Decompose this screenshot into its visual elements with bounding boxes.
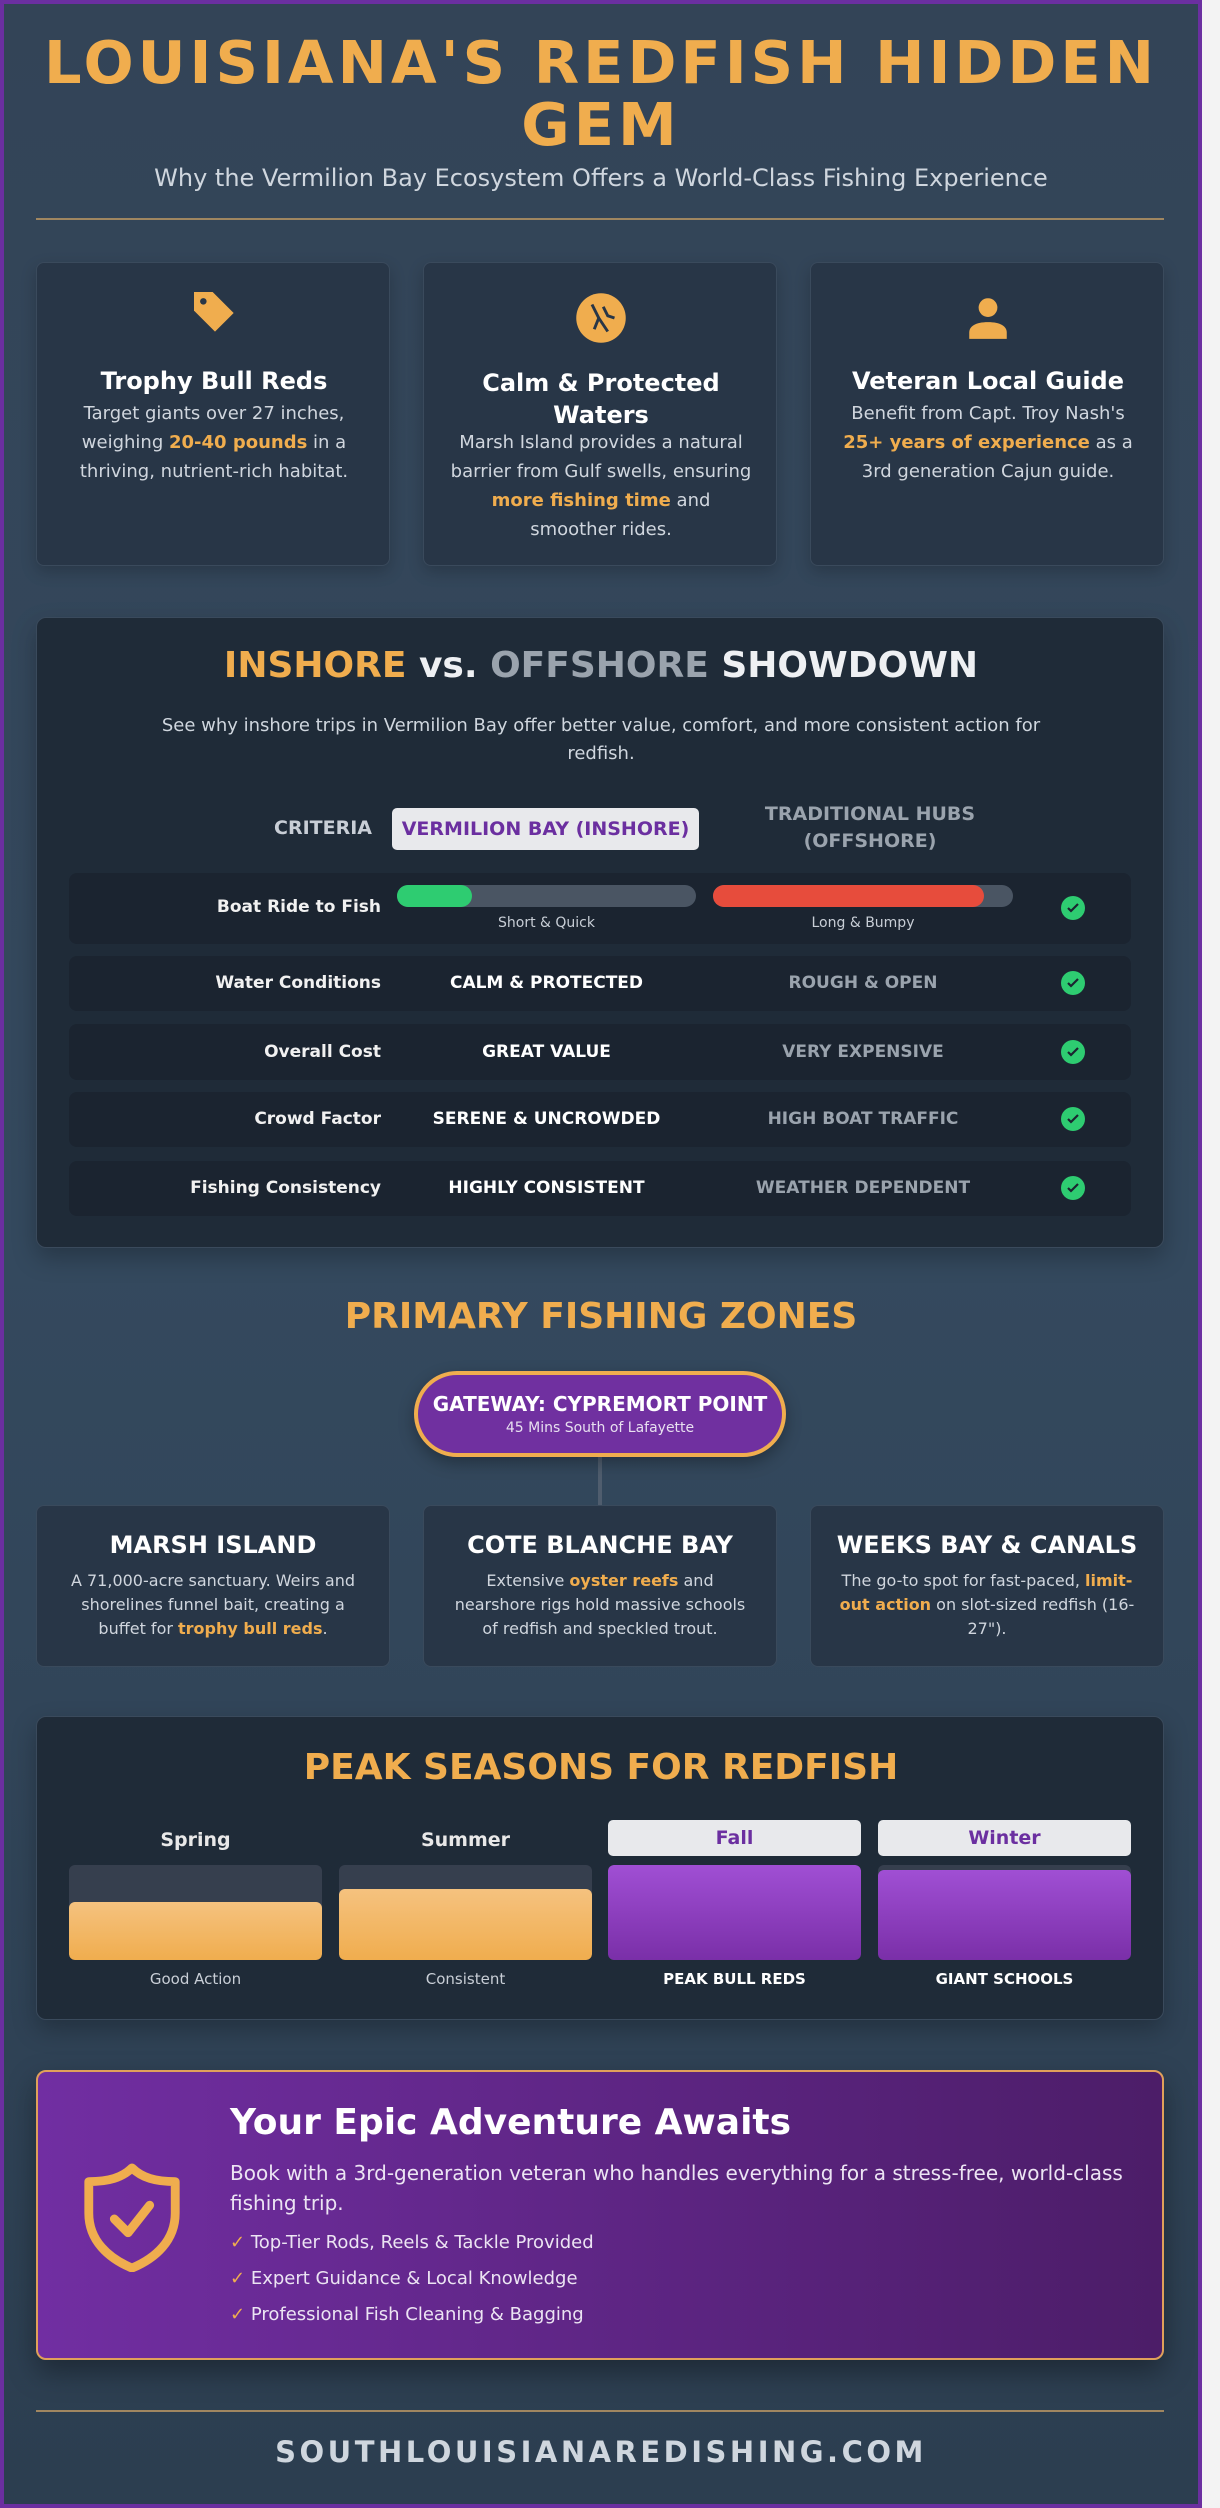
row: boat ride bbox=[69, 873, 1131, 944]
bar: offshore bbox=[713, 885, 1013, 907]
text: GIANT SCHOOLS bbox=[936, 1970, 1073, 1988]
row: consistency bbox=[69, 1161, 1131, 1216]
bar: inshore bbox=[397, 885, 696, 907]
vermilion bay header: VERMILION BAY (INSHORE) bbox=[402, 818, 689, 840]
text: Benefit from Capt. Troy Nash's 25+ years of experience as a 3rd generation Cajun guide. bbox=[843, 403, 1133, 482]
row: crowd: SERENE & UNCROWDED bbox=[433, 1109, 660, 1129]
row: crowd bbox=[69, 1092, 1131, 1147]
text: PEAK BULL REDS bbox=[663, 1970, 806, 1988]
row: cost bbox=[69, 1024, 1131, 1080]
season: fall bbox=[608, 1820, 861, 1988]
text: Target giants over 27 inches, weighing 20-40 pounds in a thriving, nutrient-rich habitat. bbox=[80, 403, 348, 482]
card: trophy bull reds bbox=[36, 262, 390, 566]
subtitle: Why the Vermilion Bay Ecosystem Offers a World-Class Fishing Experience bbox=[154, 164, 1048, 192]
bullet list bbox=[230, 2232, 594, 2325]
bullet list: ✓ Top-Tier Rods, Reels & Tackle Provided bbox=[230, 2232, 594, 2253]
gateway pill bbox=[414, 1371, 786, 1457]
card: calm waters bbox=[423, 262, 777, 566]
text: Book with a 3rd-generation veteran who handles everything for a stress-free, world-class fishing trip. bbox=[230, 2161, 1123, 2215]
traditional hubs header bbox=[765, 803, 975, 852]
row: cost: GREAT VALUE bbox=[482, 1042, 611, 1062]
text: Fall bbox=[716, 1827, 753, 1849]
vermilion bay header bbox=[392, 808, 699, 850]
season: winter bbox=[878, 1820, 1131, 1988]
zone: weeks bay: The go-to spot for fast-paced, limit-out action on slot-sized redfish (16-27"). bbox=[840, 1571, 1134, 1638]
gateway pill: GATEWAY: CYPREMORT POINT bbox=[433, 1392, 767, 1416]
row: boat ride: Long & Bumpy bbox=[812, 915, 914, 931]
bullet list: ✓ Expert Guidance & Local Knowledge bbox=[230, 2268, 578, 2289]
text bbox=[451, 432, 751, 540]
row: water conditions bbox=[69, 956, 1131, 1011]
text: barrier from Gulf swells, ensuring bbox=[451, 461, 751, 482]
text: Marsh Island provides a natural bbox=[459, 432, 743, 453]
icon: check bbox=[1061, 896, 1085, 920]
zone: cote blanche bay: COTE BLANCHE BAY bbox=[467, 1531, 733, 1559]
row: water conditions: ROUGH & OPEN bbox=[789, 973, 937, 993]
row: boat ride: Boat Ride to Fish bbox=[217, 897, 381, 917]
text: Winter bbox=[968, 1827, 1041, 1849]
callout: epic adventure bbox=[36, 2070, 1164, 2360]
heading: primary fishing zones: PRIMARY FISHING ZONES bbox=[345, 1296, 857, 1337]
season: spring bbox=[69, 1829, 322, 1988]
text: Consistent bbox=[426, 1970, 505, 1988]
row: consistency: Fishing Consistency bbox=[190, 1178, 381, 1198]
icon: person bbox=[969, 298, 1007, 339]
bullet list: ✓ Professional Fish Cleaning & Bagging bbox=[230, 2304, 584, 2325]
icon: tag bbox=[194, 292, 234, 332]
row: cost: Overall Cost bbox=[264, 1042, 381, 1062]
title: GEM bbox=[521, 90, 681, 159]
column headers bbox=[274, 803, 975, 852]
footer url: SOUTHLOUISIANAREDISHING.COM bbox=[275, 2435, 927, 2469]
zone: weeks bay: WEEKS BAY & CANALS bbox=[837, 1531, 1137, 1559]
row: boat ride: Short & Quick bbox=[498, 915, 595, 931]
row: water conditions: Water Conditions bbox=[215, 973, 381, 993]
card: veteran guide bbox=[810, 262, 1164, 566]
text: Spring bbox=[160, 1829, 231, 1851]
icon: compass bbox=[576, 293, 626, 343]
panel: inshore vs offshore bbox=[36, 617, 1164, 1248]
gateway pill: 45 Mins South of Lafayette bbox=[506, 1420, 694, 1436]
heading: Waters bbox=[553, 401, 649, 429]
heading: PEAK SEASONS FOR REDFISH bbox=[304, 1747, 898, 1788]
traditional hubs header: (OFFSHORE) bbox=[804, 830, 936, 852]
text: Summer bbox=[421, 1829, 510, 1851]
panel: peak seasons bbox=[36, 1716, 1164, 2020]
zone: marsh island: MARSH ISLAND bbox=[110, 1531, 316, 1559]
text: Good Action bbox=[150, 1970, 241, 1988]
traditional hubs header: TRADITIONAL HUBS bbox=[765, 803, 975, 825]
criteria header: CRITERIA bbox=[274, 817, 372, 839]
row: consistency: WEATHER DEPENDENT bbox=[756, 1178, 970, 1198]
row: crowd: Crowd Factor bbox=[254, 1109, 381, 1129]
zone: cote blanche bay bbox=[423, 1505, 777, 1667]
zone: cote blanche bay: Extensive oyster reefs and nearshore rigs hold massive schools of redfish and speckled trout. bbox=[455, 1571, 745, 1638]
connector line bbox=[598, 1455, 602, 1507]
heading: INSHORE vs. OFFSHORE SHOWDOWN bbox=[224, 645, 978, 686]
heading bbox=[482, 369, 720, 429]
heading: Calm & Protected bbox=[482, 369, 720, 397]
heading: Trophy Bull Reds bbox=[101, 367, 327, 395]
text: smoother rides. bbox=[530, 519, 672, 540]
icon: shield bbox=[84, 2164, 180, 2272]
title: LOUISIANA'S REDFISH HIDDEN bbox=[44, 28, 1158, 97]
row: water conditions: CALM & PROTECTED bbox=[450, 973, 643, 993]
subtitle: See why inshore trips in Vermilion Bay offer better value, comfort, and more consistent action for redfish. bbox=[162, 715, 1040, 764]
title bbox=[44, 28, 1158, 159]
row: crowd: HIGH BOAT TRAFFIC bbox=[768, 1109, 958, 1129]
text: more fishing time and bbox=[492, 490, 710, 511]
zone: marsh island: A 71,000-acre sanctuary. Weirs and shorelines funnel bait, creating a buffet for trophy bull reds. bbox=[71, 1571, 355, 1638]
zone: weeks bay bbox=[810, 1505, 1164, 1667]
season: summer bbox=[339, 1829, 592, 1988]
heading: Your Epic Adventure Awaits bbox=[230, 2102, 791, 2143]
row: consistency: HIGHLY CONSISTENT bbox=[448, 1178, 645, 1198]
heading: Veteran Local Guide bbox=[852, 367, 1124, 395]
row: cost: VERY EXPENSIVE bbox=[782, 1042, 944, 1062]
zone: marsh island bbox=[36, 1505, 390, 1667]
